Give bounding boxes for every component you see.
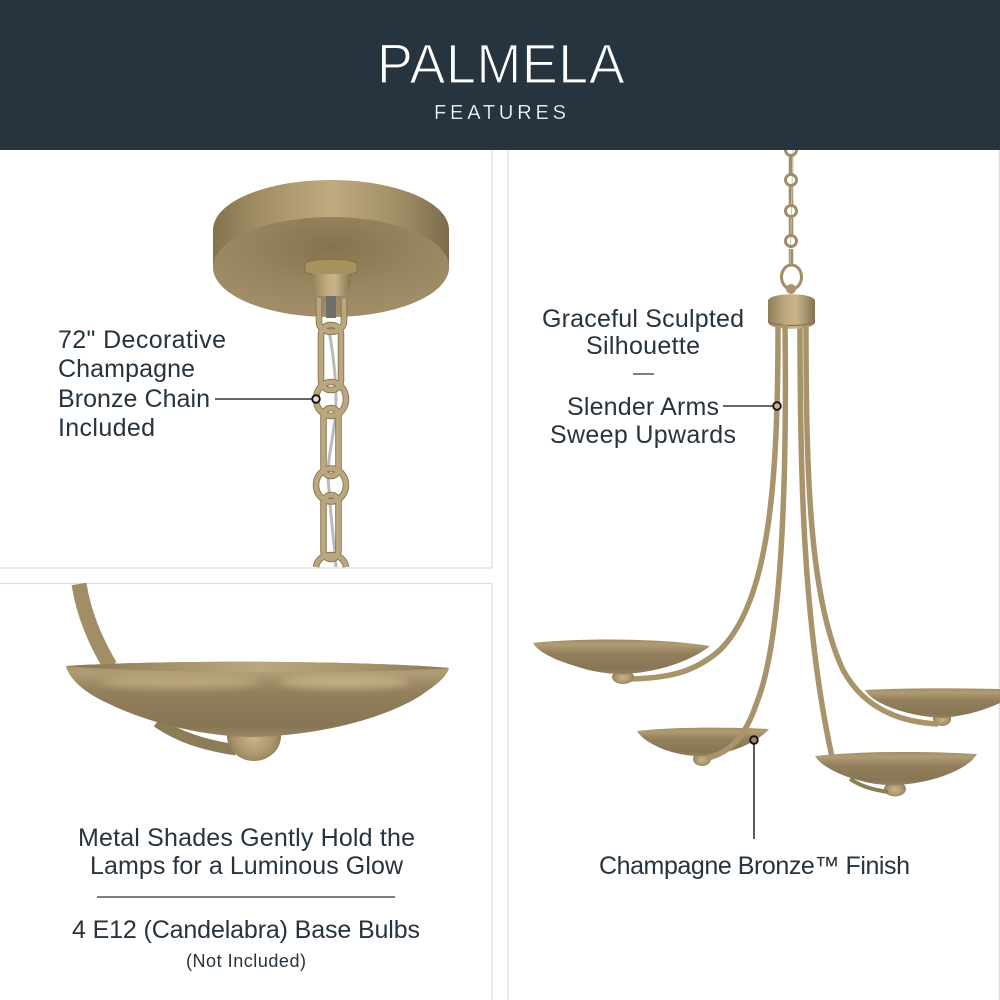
callout text: silhouette and arms: Sweep Upwards	[550, 421, 736, 449]
callout leader: chain	[215, 395, 320, 403]
knob	[227, 711, 281, 761]
callout text: shades and bulbs: (Not Included)	[186, 951, 306, 971]
title: PALMELA	[377, 32, 625, 95]
large shade	[66, 662, 449, 737]
canopy	[213, 180, 449, 317]
callout leader: finish	[750, 736, 758, 839]
callout text: shades and bulbs	[72, 824, 420, 971]
arm: right	[806, 325, 938, 724]
panel: chain close-up	[58, 180, 449, 567]
shade: upper left	[533, 640, 710, 684]
callout text: shades and bulbs: 4 E12 (Candelabra) Base Bulbs	[72, 916, 420, 944]
shade: lower left	[637, 325, 785, 766]
header banner	[0, 0, 1000, 150]
top cap	[768, 284, 815, 329]
callout text: silhouette and arms: Slender Arms	[567, 393, 719, 421]
callout text: silhouette and arms	[542, 305, 744, 449]
callout text: chain: 72" Decorative	[58, 326, 226, 354]
callout text: chain	[58, 326, 226, 442]
chain cord	[327, 322, 336, 567]
subtitle: FEATURES	[434, 102, 566, 124]
chain links	[316, 298, 346, 567]
callout text: chain: Champagne	[58, 355, 195, 383]
arm: upper left	[630, 325, 778, 679]
arm: lower right	[800, 325, 832, 757]
callout text: shades and bulbs: Lamps for a Luminous Glow	[90, 852, 404, 880]
panel: shade close-up	[66, 584, 449, 971]
hanging chain	[782, 144, 802, 289]
upper arm	[79, 584, 110, 666]
callout text: chain: Bronze Chain	[58, 385, 210, 413]
callout text: silhouette and arms: Graceful Sculpted	[542, 305, 744, 333]
callout text: shades and bulbs: Metal Shades Gently Hold the	[78, 824, 415, 852]
lower arm	[157, 722, 236, 750]
panel: full chandelier	[533, 144, 1000, 880]
callout text: finish: Champagne Bronze™ Finish	[599, 852, 910, 880]
shade: right	[865, 688, 1000, 726]
callout leader: arms	[723, 402, 781, 410]
callout text: silhouette and arms: Silhouette	[586, 332, 700, 360]
callout text: chain: Included	[58, 414, 155, 442]
shade: lower right	[815, 752, 977, 796]
